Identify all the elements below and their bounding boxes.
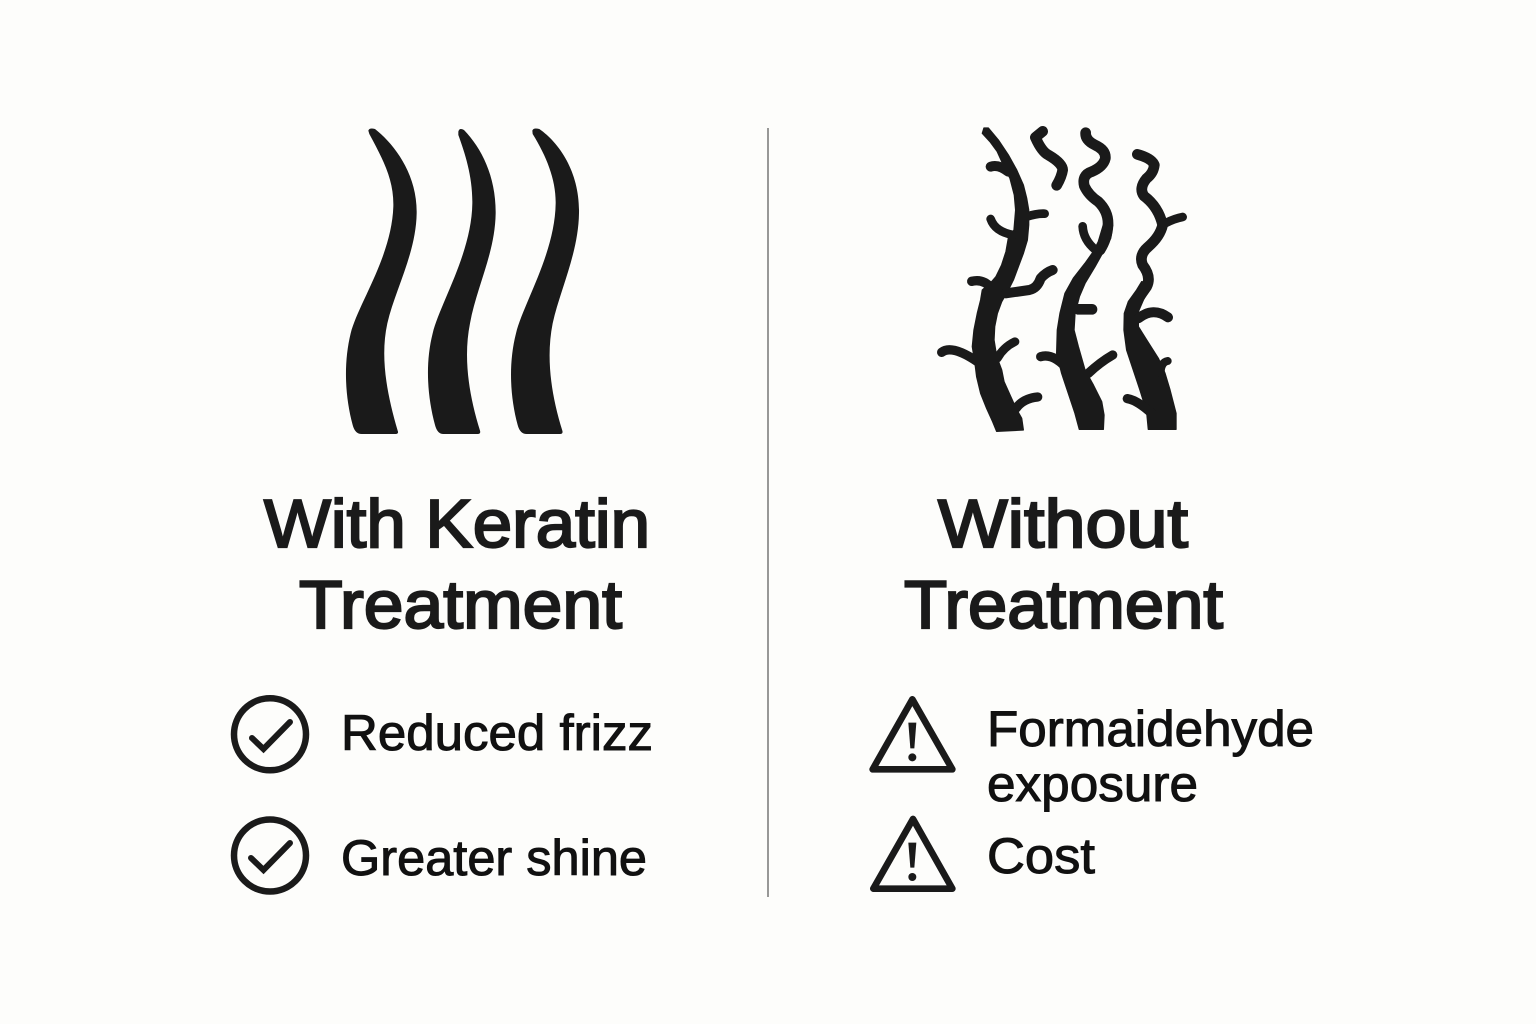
benefit: reduced frizz (234, 698, 653, 770)
icon: smooth hair strands (346, 128, 579, 434)
panel: with keratin treatment (234, 128, 653, 891)
drawback: cost (873, 819, 1095, 889)
heading: with keratin treatment (264, 486, 650, 643)
benefit: greater shine: Greater shine (341, 830, 647, 886)
heading: without treatment: Without (938, 486, 1188, 562)
icon: damaged frizzy hair strands (942, 128, 1183, 431)
heading: without treatment (904, 486, 1223, 643)
heading: with keratin treatment: Treatment (299, 567, 622, 643)
panel: without treatment (873, 128, 1314, 889)
benefit: reduced frizz: Reduced frizz (341, 705, 653, 761)
heading: without treatment: Treatment (904, 567, 1223, 643)
drawback: formaldehyde exposure: exposure (987, 756, 1198, 812)
benefit: greater shine (234, 820, 647, 892)
heading: with keratin treatment: With Keratin (264, 486, 650, 562)
drawback: cost: Cost (987, 828, 1095, 884)
drawback: formaldehyde exposure: Formaidehyde (987, 701, 1314, 757)
drawback: formaldehyde exposure (873, 699, 1314, 812)
